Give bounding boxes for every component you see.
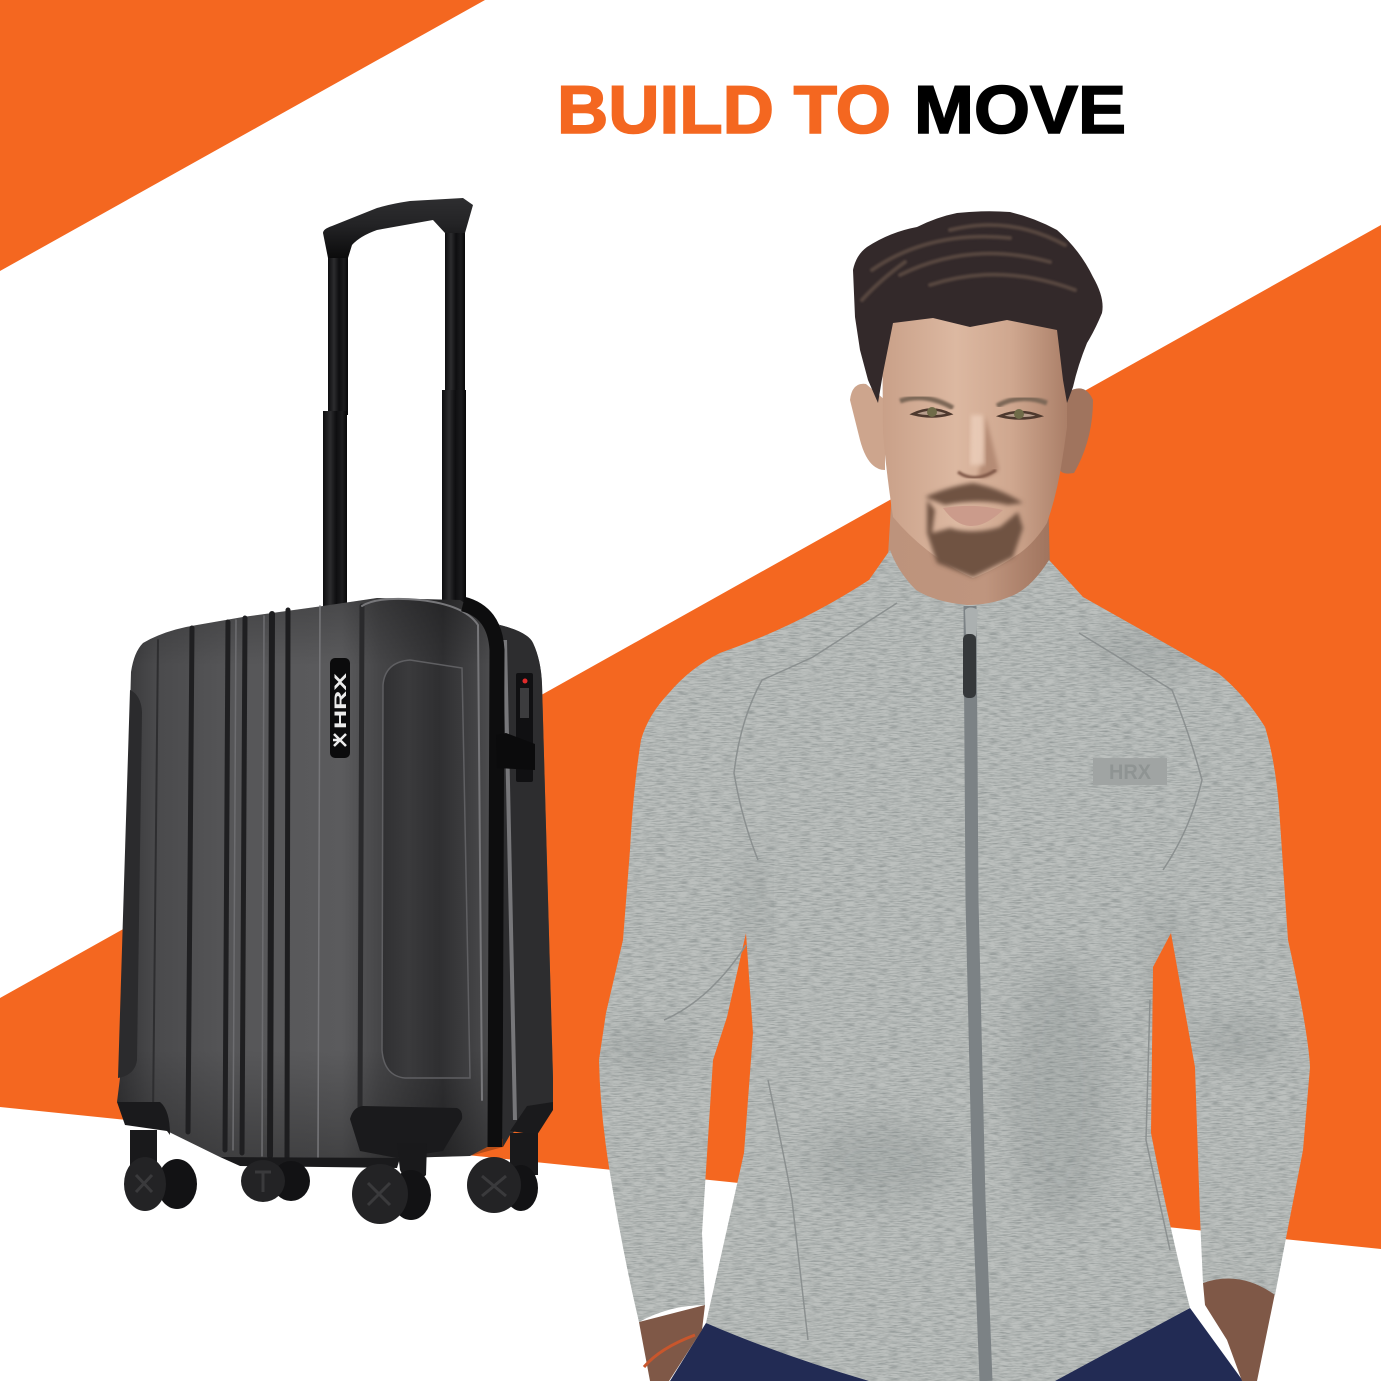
eyes [900, 398, 1047, 419]
title: BUILD TO [557, 72, 891, 148]
goatee and moustache [925, 483, 1023, 577]
jacket [590, 540, 1320, 1381]
nose highlight [970, 415, 985, 465]
chest logo [1093, 758, 1167, 785]
suitcase side panel [500, 625, 553, 1147]
suitcase shell vertical shading [117, 598, 503, 1162]
trousers [670, 1308, 1243, 1381]
wheel logos [136, 1172, 506, 1205]
lips [943, 506, 1003, 526]
wrist thread [644, 1335, 695, 1367]
jacket shading [610, 630, 1285, 1220]
suitcase recessed panel [382, 660, 470, 1078]
nose shading [978, 415, 999, 478]
HRX badge [330, 658, 350, 758]
jacket zipper [970, 606, 986, 1381]
chest logo: HRX [1109, 761, 1151, 784]
background: diagonal orange band [0, 225, 1381, 1249]
jacket heather texture [590, 540, 1320, 1381]
wheels [124, 1130, 538, 1224]
background: top-left orange triangle [0, 0, 485, 271]
face [882, 300, 1067, 578]
corner guards [117, 1102, 553, 1168]
jacket seams [664, 603, 1202, 1340]
hands [639, 1277, 1275, 1381]
hair [853, 211, 1103, 403]
suitcase [117, 198, 553, 1224]
suitcase shell [117, 598, 553, 1162]
head [850, 211, 1103, 578]
suitcase handle [323, 198, 473, 607]
HRX badge: HRX [331, 672, 350, 729]
suitcase ribs [153, 599, 482, 1158]
zipper [463, 604, 497, 1147]
suitcase left side recess [118, 690, 142, 1078]
zip puller [965, 608, 978, 636]
zip tab [963, 634, 976, 698]
ears [850, 384, 1093, 474]
title: MOVE [914, 72, 1126, 148]
nostrils [958, 470, 996, 478]
hair strands [862, 225, 1075, 300]
neck [888, 490, 1050, 605]
man [590, 211, 1320, 1381]
combination lock [496, 673, 535, 782]
side panel rim [505, 640, 515, 1120]
